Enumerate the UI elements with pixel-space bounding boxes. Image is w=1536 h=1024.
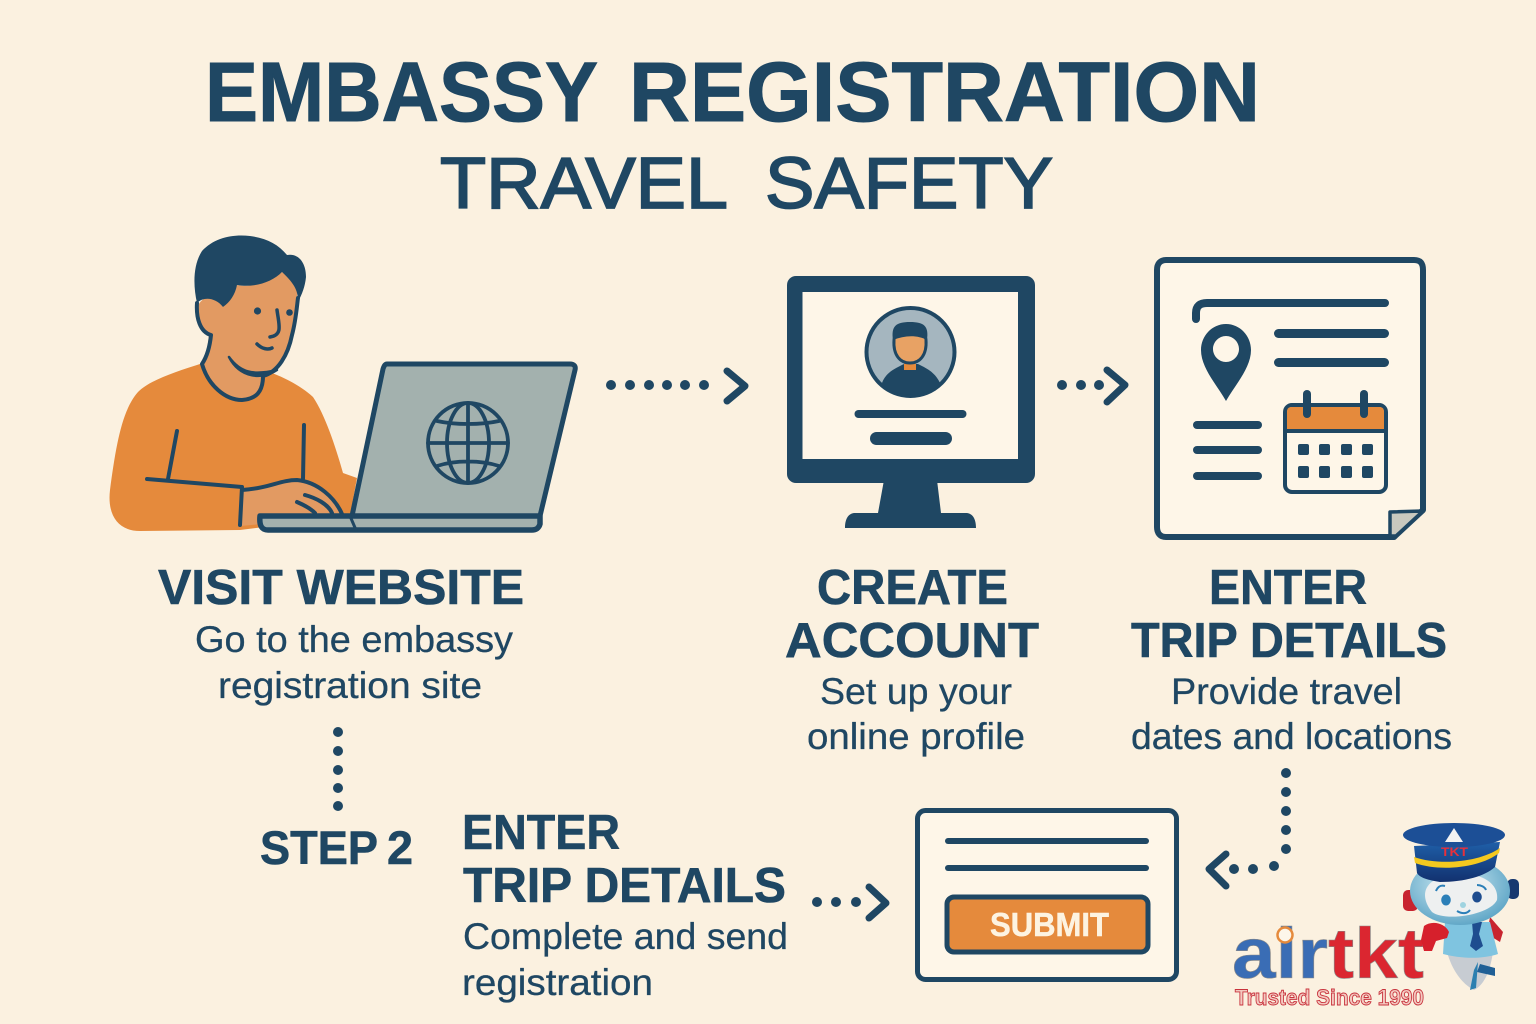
step 2 label: STEP bbox=[260, 821, 378, 874]
step: complete and send: TRIP DETAILS bbox=[463, 859, 786, 913]
step: complete and send: Complete and send bbox=[463, 916, 788, 957]
submit button bbox=[947, 897, 1148, 952]
illustration: person at laptop bbox=[110, 236, 575, 531]
mascot cap: TKT bbox=[1441, 845, 1469, 859]
laptop screen bbox=[352, 364, 575, 516]
laptop base bbox=[260, 516, 540, 530]
step: complete and send: ENTER bbox=[462, 806, 620, 860]
mascot legs bbox=[1447, 952, 1493, 990]
page fold bbox=[1390, 511, 1423, 536]
hand bbox=[241, 480, 343, 526]
step: complete and send bbox=[462, 806, 788, 1003]
step: visit website: registration site bbox=[218, 665, 482, 706]
monitor stand bbox=[845, 480, 976, 528]
profile text lines bbox=[854, 410, 966, 418]
subtitle: SAFETY bbox=[765, 144, 1053, 224]
logo dot bbox=[1278, 928, 1292, 942]
step: create account: online profile bbox=[807, 716, 1025, 757]
detail lines bbox=[1193, 329, 1389, 480]
icon: computer monitor with profile bbox=[787, 276, 1035, 528]
step: visit website: Go to the embassy bbox=[195, 619, 514, 660]
face and neck bbox=[198, 272, 297, 400]
hair bbox=[194, 236, 306, 307]
monitor frame bbox=[787, 276, 1035, 483]
mascot bbox=[1403, 823, 1519, 990]
face outlines bbox=[197, 298, 298, 400]
logo tagline: Trusted Since 1990 bbox=[1235, 985, 1424, 1010]
icon: submit form bbox=[918, 810, 1176, 980]
step: complete and send: registration bbox=[462, 962, 653, 1003]
title bbox=[205, 45, 1260, 224]
arrow: trip details to submit bbox=[1209, 768, 1291, 886]
icon: calendar bbox=[1285, 390, 1386, 492]
arrow: to submit form bbox=[812, 887, 886, 918]
step: create account bbox=[785, 561, 1039, 757]
logo: airtkt: airtkt bbox=[1232, 915, 1424, 994]
mascot right arm and ears bbox=[1487, 917, 1503, 942]
eyes, nose and mouth bbox=[254, 307, 293, 349]
mascot eyes and smile bbox=[1436, 885, 1486, 913]
step: create account: CREATE bbox=[817, 561, 1008, 615]
avatar bbox=[866, 308, 954, 396]
header line bbox=[1196, 303, 1385, 319]
step: visit website bbox=[158, 561, 524, 706]
arrow: visit website to create account bbox=[606, 371, 745, 401]
icon: trip details document bbox=[1157, 260, 1423, 537]
icon: location pin bbox=[1201, 324, 1251, 401]
subtitle: TRAVEL bbox=[440, 144, 728, 224]
mascot head bbox=[1410, 857, 1510, 925]
mascot cap bbox=[1403, 823, 1505, 882]
arrow: dotted line down to step 2 bbox=[333, 727, 343, 811]
arrow: create account to trip details bbox=[1057, 370, 1125, 402]
title: REGISTRATION bbox=[629, 45, 1260, 139]
step: visit website: VISIT WEBSITE bbox=[158, 561, 524, 615]
step 2 label: 2 bbox=[387, 821, 413, 874]
monitor screen bbox=[802, 292, 1018, 459]
step: enter trip details bbox=[1131, 561, 1452, 757]
sweater fold lines bbox=[147, 425, 342, 525]
sweater bbox=[110, 363, 357, 531]
submit button: SUBMIT bbox=[990, 906, 1109, 943]
profile button bbox=[870, 432, 952, 445]
step: create account: ACCOUNT bbox=[785, 614, 1039, 668]
mascot body bbox=[1443, 922, 1498, 958]
step: enter trip details: ENTER bbox=[1209, 561, 1367, 615]
globe icon bbox=[428, 403, 508, 483]
jaw shadow bbox=[229, 357, 277, 376]
mascot hand bbox=[1421, 923, 1449, 951]
mascot tie bbox=[1470, 922, 1483, 951]
step: enter trip details: dates and locations bbox=[1131, 716, 1452, 757]
step: enter trip details: Provide travel bbox=[1171, 671, 1402, 712]
document sheet bbox=[1157, 260, 1423, 537]
step: enter trip details: TRIP DETAILS bbox=[1131, 614, 1447, 668]
subtitle bbox=[440, 144, 1053, 224]
step: create account: Set up your bbox=[820, 671, 1012, 712]
title: EMBASSY bbox=[205, 45, 598, 139]
